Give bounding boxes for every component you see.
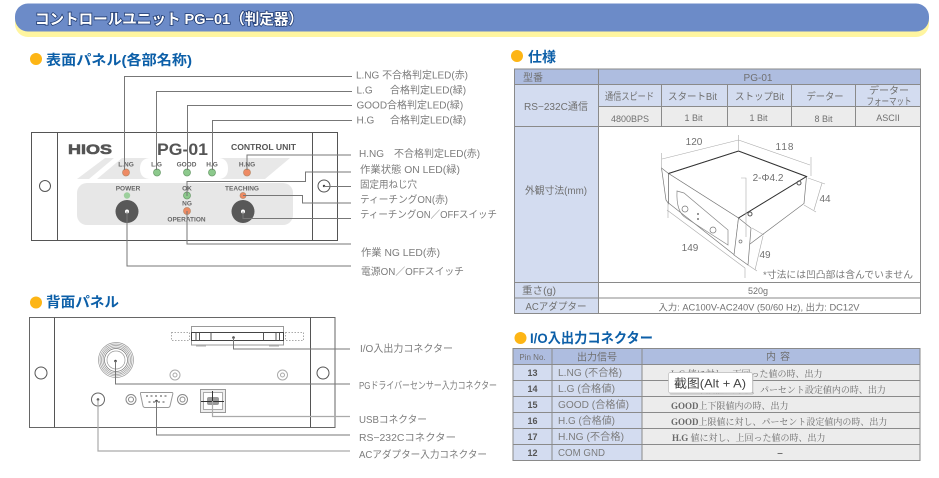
- front panel leader lines: [124, 76, 352, 266]
- table labels: 1 Bit: [684, 113, 703, 123]
- box body: [662, 151, 806, 265]
- table labels: 入力: AC100V-AC240V (50/60 Hz), 出力: DC12V: [658, 302, 860, 312]
- front panel drawing: [32, 132, 338, 240]
- teaching switch: [232, 200, 254, 223]
- front panel labels: 作業 NG LED(赤): [361, 246, 440, 259]
- control unit label: CONTROL UNIT: [231, 143, 296, 152]
- front panel labels: ティーチングON／OFFスイッチ: [360, 208, 497, 221]
- title banner: [15, 4, 929, 37]
- table labels: 1 Bit: [749, 113, 768, 123]
- LED labels: H.G: [206, 162, 218, 168]
- table labels: 重さ(g): [522, 284, 556, 297]
- table text: H.G 値に対し、上回った値の時、出力: [672, 432, 826, 443]
- rear panel labels: RS−232Cコネクター: [359, 432, 456, 444]
- table text: GOOD下限値に対し、パーセント設定値内の時、出力: [671, 384, 886, 395]
- table labels: フォーマット: [866, 97, 912, 108]
- table text: L.G (合格値): [558, 382, 615, 395]
- front panel labels: 不合格判定LED(赤): [394, 147, 480, 160]
- LED labels: OPERATION: [167, 216, 206, 224]
- table labels: ASCII: [876, 113, 900, 123]
- LED labels: POWER: [116, 186, 141, 192]
- specification table: [514, 69, 920, 314]
- heading: front panel: 表面パネル(各部名称): [46, 52, 192, 68]
- LED labels: NG: [182, 200, 192, 208]
- table labels: 8 Bit: [814, 114, 833, 124]
- LED labels: [116, 162, 259, 224]
- front panel labels: [356, 68, 497, 278]
- table text: GOOD (合格値): [558, 398, 629, 411]
- table text: –: [777, 448, 783, 459]
- dimension labels: 118: [776, 142, 794, 153]
- front panel labels: L.NG 不合格判定LED(赤): [356, 68, 468, 82]
- heading: specifications: [511, 49, 556, 65]
- model name: PG-01: [157, 140, 208, 159]
- table text: Pin No.: [519, 353, 546, 362]
- table text: GOOD上限値に対し、パーセント設定値内の時、出力: [671, 416, 887, 427]
- front panel labels: GOOD合格判定LED(緑): [356, 98, 463, 112]
- heading: I/O connector: I/O入出力コネクター: [530, 330, 653, 346]
- table text: 13: [527, 368, 538, 378]
- PG sensor connector: [98, 342, 134, 378]
- table labels: 外観寸法(mm): [525, 184, 587, 197]
- front panel labels: H.G: [356, 116, 374, 126]
- front panel labels: L.G: [356, 86, 373, 96]
- table labels: [522, 71, 912, 313]
- rear panel labels: PGドライバーセンサー入力コネクター: [359, 379, 497, 392]
- LED labels: GOOD: [177, 162, 197, 168]
- rear panel leader lines: [98, 338, 350, 451]
- AC jack: [92, 393, 104, 406]
- table labels: ストップBit: [735, 91, 784, 103]
- LED band: [77, 158, 297, 179]
- table labels: 通信スピード: [605, 90, 654, 103]
- screenshot tooltip: 截图(Alt + A): [674, 376, 746, 390]
- title: コントロールユニット PG−01（判定器）: [35, 11, 303, 28]
- RS-232C connector: [126, 392, 188, 408]
- dimension lines: [662, 135, 825, 278]
- table labels: スタートBit: [668, 91, 717, 103]
- dimension labels: [682, 137, 913, 281]
- table labels: データー: [869, 84, 909, 97]
- table text: L.G 値に対し、下回った値の時、出力: [671, 368, 822, 379]
- front panel labels: 作業状態 ON LED(緑): [360, 163, 460, 176]
- I/O connector table: [513, 348, 920, 460]
- table text: 内容: [766, 350, 794, 363]
- table text: 14: [527, 384, 538, 394]
- screenshot tooltip: [668, 372, 754, 395]
- logo: HIOS: HIOS: [68, 141, 112, 157]
- rear panel labels: USBコネクター: [359, 414, 427, 426]
- table text: H.G (合格値): [558, 414, 615, 427]
- front panel labels: H.NG: [359, 149, 384, 160]
- table text: GOOD上下限値内の時、出力: [671, 400, 789, 411]
- LED labels: L.G: [151, 162, 162, 168]
- table labels: 520g: [748, 286, 768, 296]
- dimension labels: 49: [759, 250, 771, 261]
- heading: specifications: 仕様: [528, 49, 556, 65]
- table text: [519, 350, 887, 459]
- rear panel drawing: [30, 318, 335, 428]
- LED labels: OK: [182, 186, 192, 192]
- table text: 12: [527, 448, 538, 458]
- USB connector: [200, 390, 226, 416]
- table labels: 4800BPS: [611, 114, 649, 124]
- dimension labels: *寸法には凹凸部は含んでいません: [763, 269, 913, 281]
- front panel labels: 合格判定LED(緑): [390, 84, 466, 96]
- table labels: ACアダプター: [526, 300, 586, 313]
- dimension labels: 44: [819, 194, 831, 205]
- table labels: 型番: [523, 71, 543, 84]
- box dimension drawing: [662, 135, 913, 281]
- dimension labels: 120: [686, 137, 703, 148]
- table text: H.NG (不合格): [558, 430, 624, 443]
- dimension labels: 149: [682, 243, 699, 254]
- table text: L.NG (不合格): [558, 366, 622, 379]
- LED labels: TEACHING: [225, 186, 259, 192]
- table labels: RS−232C通信: [524, 100, 588, 113]
- table text: COM GND: [558, 448, 605, 459]
- LED labels: L.NG: [118, 162, 134, 168]
- table text: 16: [527, 416, 538, 426]
- LEDs: [122, 169, 250, 214]
- screws: [170, 370, 288, 380]
- rear panel labels: ACアダプター入力コネクター: [359, 448, 487, 461]
- rear panel labels: [359, 342, 497, 461]
- front panel labels: 電源ON／OFFスイッチ: [361, 265, 464, 278]
- table labels: PG-01: [744, 73, 773, 84]
- front panel labels: 固定用ねじ穴: [360, 179, 417, 191]
- dimension labels: 2-Φ4.2: [753, 173, 784, 184]
- table text: 17: [527, 432, 538, 442]
- table labels: データー: [806, 90, 844, 103]
- I/O connector: [172, 326, 304, 346]
- table text: 15: [527, 400, 538, 410]
- rear panel labels: I/O入出力コネクター: [360, 342, 453, 355]
- LED labels: H.NG: [239, 162, 255, 168]
- table text: 出力信号: [577, 350, 617, 364]
- front panel labels: 合格判定LED(緑): [390, 114, 466, 126]
- front panel labels: ティーチングON(赤): [360, 193, 448, 206]
- heading: rear panel: 背面パネル: [46, 294, 119, 310]
- operation area: [77, 183, 293, 225]
- power switch: [116, 200, 138, 223]
